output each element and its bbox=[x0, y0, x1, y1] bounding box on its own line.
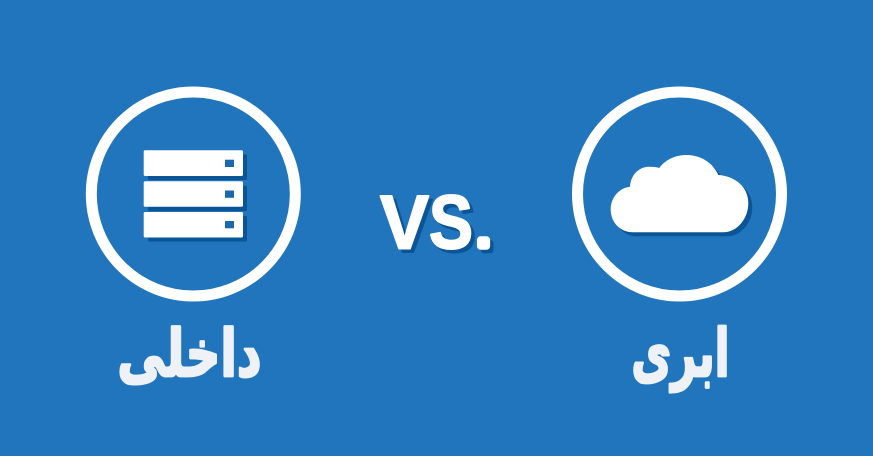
heading: VS.: V bbox=[384, 184, 433, 269]
icon: server stack bbox=[144, 150, 247, 242]
label: on-premise: داخلی bbox=[117, 317, 262, 392]
icon: circle ring left bbox=[91, 92, 295, 296]
heading: VS.: S bbox=[432, 184, 476, 269]
panel: on-premise bbox=[91, 92, 295, 392]
icon: circle ring right bbox=[578, 92, 782, 296]
panel: cloud bbox=[578, 92, 782, 393]
heading: VS.: V bbox=[380, 180, 429, 266]
heading: VS.: . bbox=[478, 211, 489, 255]
label: cloud: ابری bbox=[631, 316, 730, 393]
icon: cloud bbox=[611, 155, 752, 236]
heading: VS.: . bbox=[482, 214, 493, 258]
heading: VS. bbox=[380, 180, 493, 269]
heading: VS.: S bbox=[429, 180, 473, 266]
